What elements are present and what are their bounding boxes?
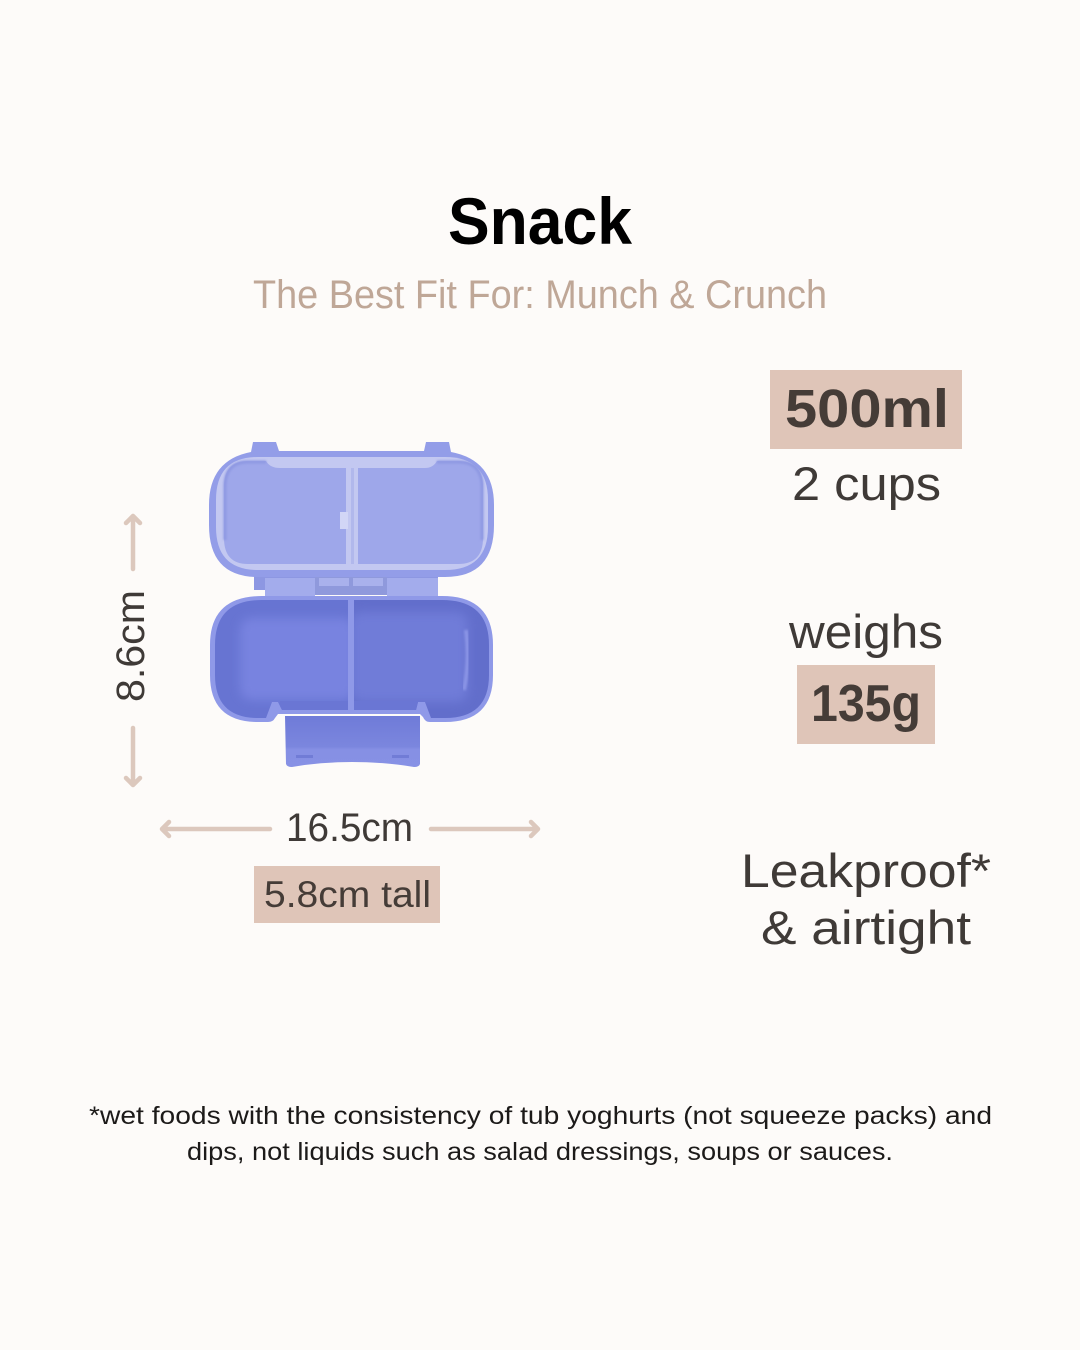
capacity tag: 500ml (785, 379, 949, 439)
weight tag: 135g (811, 675, 921, 733)
width label: 16.5cm (286, 806, 413, 850)
capacity tag (770, 370, 962, 449)
cups text: 2 cups (792, 457, 941, 510)
subtitle: The Best Fit For: Munch & Crunch (253, 273, 827, 317)
height arrow (126, 516, 140, 785)
width arrow (162, 822, 538, 836)
title: Snack (448, 184, 632, 258)
base (210, 596, 493, 722)
footnote: dips, not liquids such as salad dressings, soups or sauces. (187, 1138, 893, 1166)
leakproof text (741, 844, 991, 954)
footnote: *wet foods with the consistency of tub yoghurts (not squeeze packs) and (89, 1102, 992, 1130)
lid (209, 442, 494, 577)
leakproof text: Leakproof* (741, 844, 991, 897)
height tag (254, 866, 440, 923)
footnote (89, 1102, 992, 1166)
height tag: 5.8cm tall (264, 874, 431, 915)
height label: 8.6cm (109, 590, 153, 702)
tray tab (285, 716, 420, 767)
left compartment (215, 600, 348, 718)
weighs text: weighs (788, 605, 943, 658)
right compartment (354, 600, 489, 718)
leakproof text: & airtight (761, 901, 971, 954)
product image: lunchbox (209, 442, 494, 767)
hinge (254, 576, 438, 597)
weight tag (797, 665, 935, 744)
